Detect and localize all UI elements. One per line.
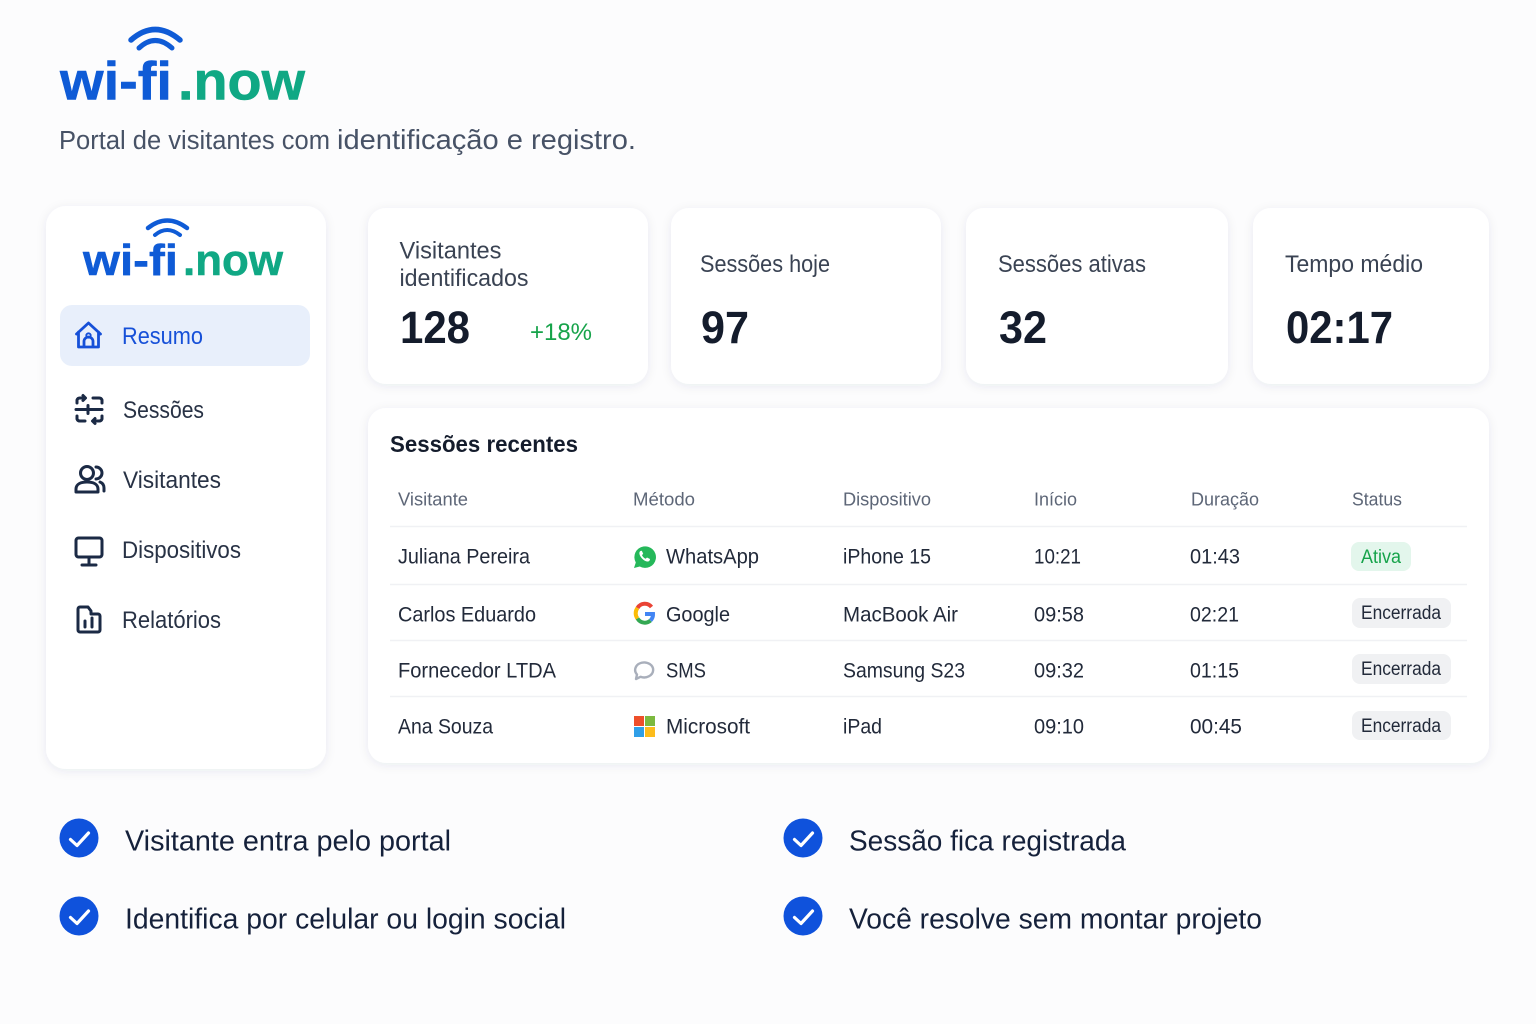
benefit: Identifica por celular ou login social: Identifica por celular ou login social xyxy=(125,904,566,936)
benefit: Você resolve sem montar projeto xyxy=(784,896,1262,936)
stat card: Visitantes identificados: Visitantes xyxy=(400,238,502,264)
row: Ana Souza: Microsoft xyxy=(666,715,750,738)
sidebar logo: .now xyxy=(183,236,284,285)
stat card: Tempo médio xyxy=(1253,208,1489,384)
table heading: Sessões recentes xyxy=(390,431,578,457)
table header row: Início xyxy=(1034,490,1077,510)
row: Ana Souza: 00:45 xyxy=(1190,715,1242,738)
nav item: Resumo (active): Resumo xyxy=(122,323,203,350)
status: Encerrada: Encerrada xyxy=(1361,603,1441,624)
row: Juliana Pereira: 01:43 xyxy=(1190,545,1240,568)
header logo xyxy=(59,30,306,112)
icon: Google xyxy=(636,604,653,623)
row: Fornecedor LTDA: SMS xyxy=(666,659,706,682)
stat card: Visitantes identificados: 128 xyxy=(400,302,470,353)
benefit: Visitante entra pelo portal: Visitante entra pelo portal xyxy=(125,826,451,858)
nav item: Relatórios: Relatórios xyxy=(122,607,221,634)
row: Fornecedor LTDA: Samsung S23 xyxy=(843,659,965,682)
row: Ana Souza xyxy=(398,711,1451,740)
row: Juliana Pereira: WhatsApp xyxy=(666,545,759,568)
row: Juliana Pereira: 10:21 xyxy=(1034,545,1081,568)
status: Encerrada xyxy=(1352,711,1451,740)
stat card: Sessões ativas: 32 xyxy=(999,302,1047,353)
stat card: Visitantes identificados: +18% xyxy=(530,319,592,346)
stat card: Sessões hoje: Sessões hoje xyxy=(700,251,830,278)
row: Juliana Pereira xyxy=(398,542,1411,571)
status: Encerrada xyxy=(1352,654,1451,684)
status: Encerrada xyxy=(1352,598,1451,628)
row: Carlos Eduardo xyxy=(398,598,1451,628)
sidebar logo: wi-fi xyxy=(82,236,178,285)
stat card: Visitantes identificados: identificados xyxy=(400,265,528,292)
table header row: Duração xyxy=(1191,490,1259,510)
panel: sidebar xyxy=(46,206,326,769)
status: Encerrada: Encerrada xyxy=(1361,716,1441,737)
header logo: .now xyxy=(178,52,306,112)
row: Ana Souza: 09:10 xyxy=(1034,715,1084,738)
row: Carlos Eduardo: MacBook Air xyxy=(843,603,958,626)
stat card: Tempo médio: 02:17 xyxy=(1286,302,1393,353)
status: Encerrada: Encerrada xyxy=(1361,659,1441,680)
row: Carlos Eduardo: Carlos Eduardo xyxy=(398,603,536,626)
subtitle: identificação e registro. xyxy=(337,124,636,155)
nav item: Sessões xyxy=(76,396,204,424)
nav item: Visitantes xyxy=(76,466,221,494)
nav item: Dispositivos xyxy=(76,537,241,565)
icon: SMS xyxy=(635,662,653,679)
table header row: Status xyxy=(1352,490,1402,510)
table header row xyxy=(398,490,1402,510)
nav item: Relatórios xyxy=(78,607,221,634)
benefit: Visitante entra pelo portal xyxy=(60,818,451,858)
row: Juliana Pereira: Juliana Pereira xyxy=(398,545,530,568)
nav item: Sessões: Sessões xyxy=(123,397,204,424)
nav item: Resumo (active) xyxy=(60,305,310,366)
stat card: Sessões ativas xyxy=(966,208,1228,384)
table header row: Dispositivo xyxy=(843,490,931,510)
icon: Microsoft xyxy=(634,716,655,737)
row: Carlos Eduardo: 02:21 xyxy=(1190,603,1239,626)
row: Fornecedor LTDA: 09:32 xyxy=(1034,659,1084,682)
stat card: Sessões hoje: 97 xyxy=(701,302,749,353)
benefit: Sessão fica registrada xyxy=(784,818,1127,858)
nav item: Dispositivos: Dispositivos xyxy=(122,537,241,564)
sidebar logo xyxy=(82,220,284,285)
status: Ativa: Ativa xyxy=(1361,547,1401,568)
nav item: Visitantes: Visitantes xyxy=(123,467,221,494)
row: Fornecedor LTDA: 01:15 xyxy=(1190,659,1239,682)
subtitle: Portal de visitantes com xyxy=(59,127,330,155)
stat card: Sessões hoje xyxy=(671,208,941,384)
panel: recent sessions table xyxy=(368,408,1489,763)
stat card: Sessões ativas: Sessões ativas xyxy=(998,251,1146,278)
stat card: Visitantes identificados xyxy=(368,208,648,384)
row: Carlos Eduardo: 09:58 xyxy=(1034,603,1084,626)
benefit: Sessão fica registrada: Sessão fica registrada xyxy=(849,826,1127,858)
stat card: Tempo médio: Tempo médio xyxy=(1285,251,1423,278)
status: Ativa xyxy=(1351,542,1411,571)
table header row: Visitante xyxy=(398,490,468,510)
subtitle xyxy=(59,124,636,155)
icon: WhatsApp xyxy=(634,546,656,568)
row: Fornecedor LTDA: Fornecedor LTDA xyxy=(398,659,556,682)
benefit: Você resolve sem montar projeto: Você resolve sem montar projeto xyxy=(849,904,1262,936)
row: Ana Souza: iPad xyxy=(843,715,882,738)
row: Carlos Eduardo: Google xyxy=(666,603,730,626)
header logo: wi-fi xyxy=(59,52,172,112)
row: Juliana Pereira: iPhone 15 xyxy=(843,545,931,568)
table header row: Método xyxy=(633,490,695,510)
row: Fornecedor LTDA xyxy=(398,654,1451,684)
row: Ana Souza: Ana Souza xyxy=(398,715,493,738)
